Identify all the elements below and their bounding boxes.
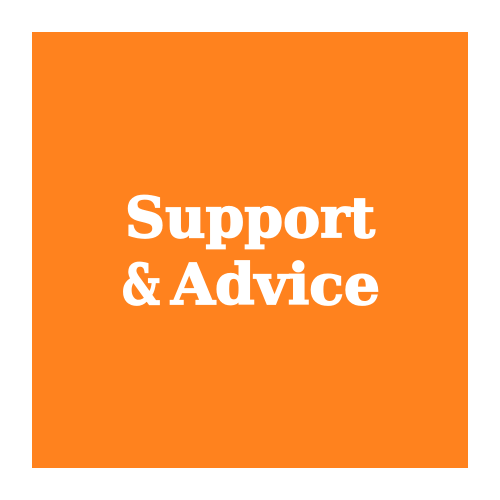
title: Support & Advice [122, 185, 380, 318]
title: Support & Advice: Advice [170, 252, 380, 318]
title: Support & Advice: Support [125, 185, 375, 251]
title: Support & Advice: & [122, 252, 160, 318]
panel: orange square [32, 32, 468, 468]
